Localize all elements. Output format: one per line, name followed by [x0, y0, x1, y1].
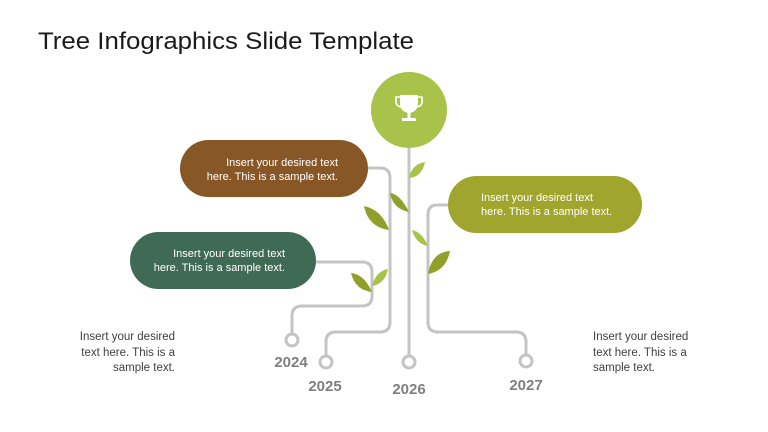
pill: olive: Insert your desired text — [481, 192, 593, 204]
years: 2027 — [509, 377, 543, 394]
left side text: Insert your desired — [80, 331, 175, 343]
trophy circle — [371, 72, 447, 148]
left side text: sample text. — [113, 362, 175, 374]
pill: brown: Insert your desired text — [226, 157, 338, 169]
pill: brown — [180, 140, 368, 197]
title: Tree Infographics Slide Template — [38, 28, 414, 55]
left side text: text here. This is a — [81, 347, 176, 359]
right side text: Insert your desired — [593, 331, 688, 343]
pill: dark green — [130, 232, 316, 289]
year nodes — [286, 334, 532, 368]
right side text: sample text. — [593, 362, 655, 374]
left side text — [80, 331, 176, 374]
years: 2024 — [274, 354, 308, 371]
pill: dark green: Insert your desired text — [173, 248, 285, 260]
years: 2026 — [392, 381, 426, 398]
right side text: text here. This is a — [593, 347, 687, 359]
right side text — [593, 331, 688, 374]
pill: dark green: here. This is a sample text. — [154, 262, 285, 274]
pill: olive: here. This is a sample text. — [481, 206, 612, 218]
leaves — [351, 162, 450, 292]
connector lines — [292, 148, 526, 356]
years — [274, 354, 543, 398]
pill: brown: here. This is a sample text. — [207, 171, 338, 183]
years: 2025 — [308, 378, 342, 395]
pill: olive — [448, 176, 642, 233]
